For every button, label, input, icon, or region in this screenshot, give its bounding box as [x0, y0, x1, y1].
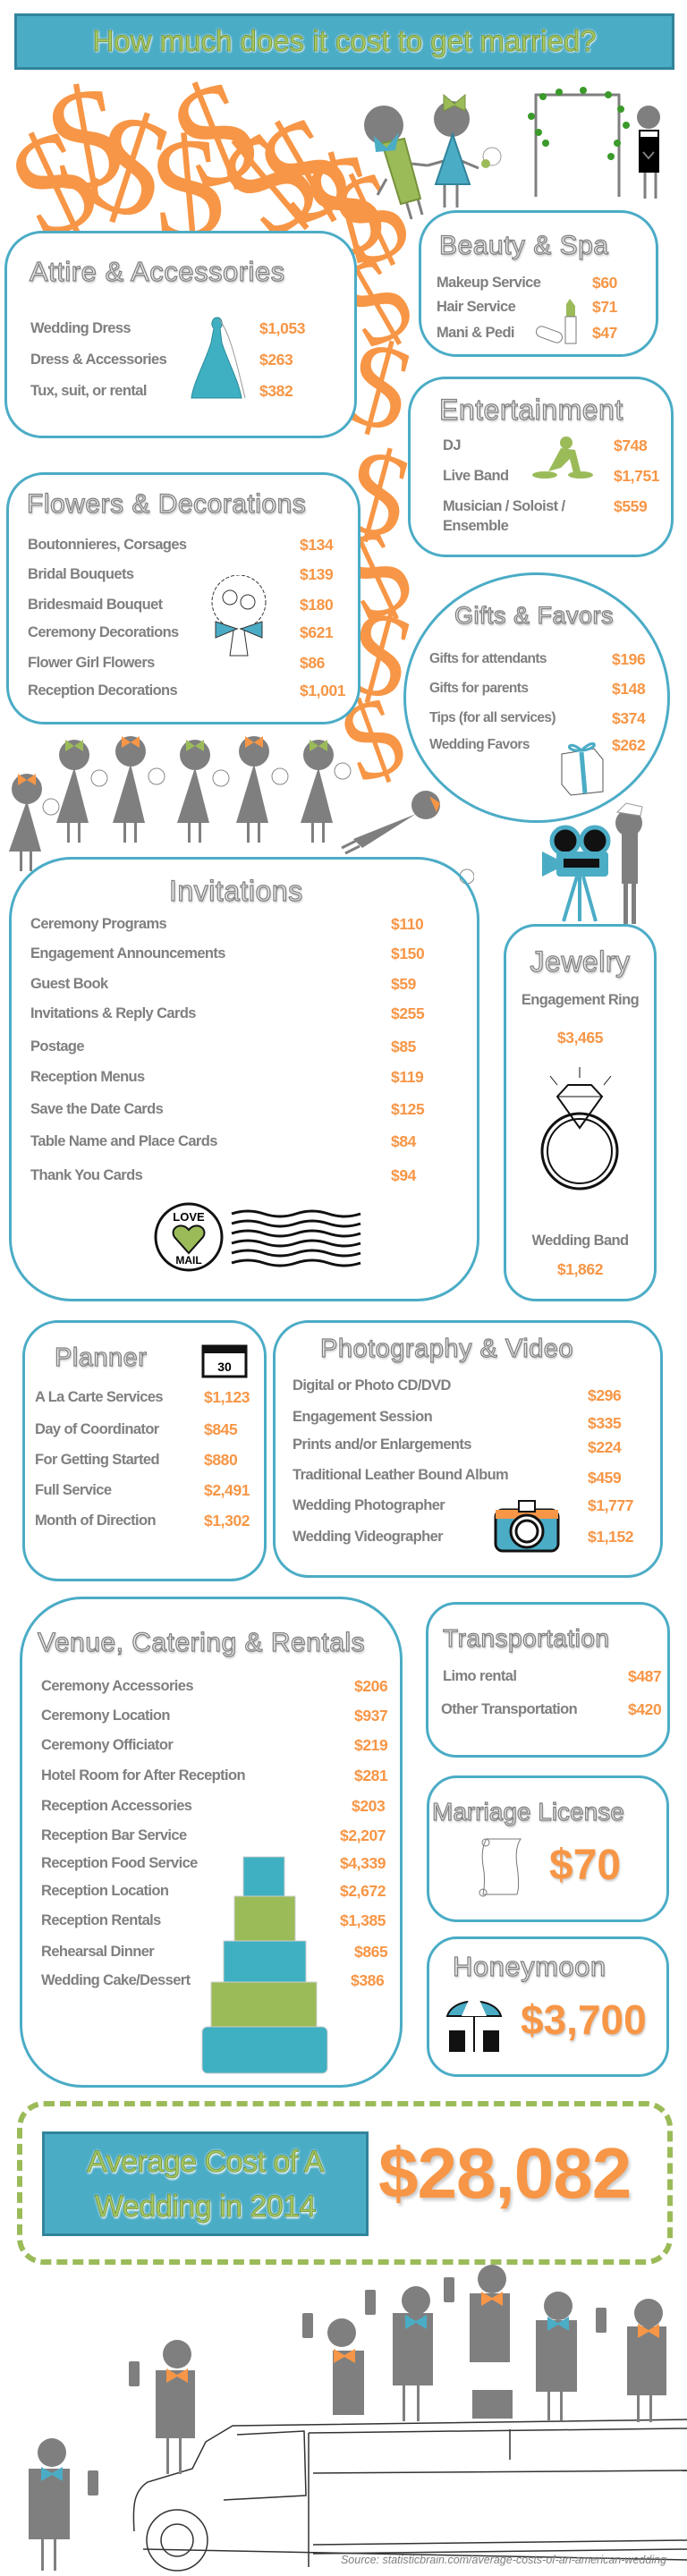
row: officiator: $219 — [354, 1736, 387, 1754]
row: other transportation — [441, 1699, 665, 1719]
row: limo: Limo rental — [443, 1668, 516, 1684]
row: full service: Full Service — [35, 1482, 111, 1498]
row: wedding band — [506, 1231, 654, 1279]
icon: scroll — [478, 1835, 528, 1900]
row: save the date: $125 — [391, 1100, 424, 1118]
row: photographer — [293, 1496, 650, 1515]
row: ceremony accessories: Ceremony Accessories — [41, 1678, 193, 1694]
decorative dollar signs: $ — [289, 120, 400, 292]
panel: marriage license — [427, 1775, 669, 1922]
row: dress & accessories — [30, 351, 293, 369]
icon: gift box — [562, 742, 603, 796]
row: reception accessories: $203 — [352, 1797, 385, 1815]
row: invitations & reply: Invitations & Reply Cards — [30, 1005, 196, 1021]
row: flower girl — [28, 654, 325, 672]
row: favors — [429, 736, 646, 754]
row: ceremony accessories — [41, 1676, 399, 1696]
row: hair — [437, 298, 617, 316]
row: bridesmaid: $180 — [300, 596, 333, 614]
row: limo: $487 — [628, 1667, 661, 1685]
row: food service: Reception Food Service — [41, 1855, 198, 1871]
row: thank you: Thank You Cards — [30, 1167, 142, 1183]
row: engagement session — [293, 1407, 650, 1427]
title banner — [14, 13, 674, 70]
row: postage: $85 — [391, 1038, 416, 1055]
row: tux: $382 — [259, 382, 293, 400]
row: musician: Musician / Soloist / — [443, 498, 565, 514]
row: reception rentals: $1,385 — [340, 1911, 386, 1929]
row: cake: Wedding Cake/Dessert — [41, 1972, 191, 1988]
row: musician — [443, 497, 648, 534]
row: digital cd — [293, 1376, 650, 1395]
row: ceremony programs: Ceremony Programs — [30, 916, 166, 932]
row: bridal bouquets — [28, 565, 333, 583]
panel: transportation — [426, 1602, 670, 1758]
panel: honeymoon — [427, 1936, 669, 2077]
decorative dollar signs: $ — [145, 106, 231, 270]
row: month of direction: $1,302 — [204, 1512, 250, 1530]
row: reception location: $2,672 — [340, 1882, 386, 1900]
row: cake — [41, 1970, 399, 1990]
row: boutonnieres: Boutonnieres, Corsages — [28, 537, 187, 553]
heading: marriage license: Marriage License — [432, 1798, 624, 1826]
row: other transportation: $420 — [628, 1700, 661, 1718]
row: reception accessories: Reception Accessories — [41, 1798, 191, 1814]
row: getting started — [35, 1450, 263, 1470]
row: album: Traditional Leather Bound Album — [293, 1467, 508, 1483]
row: ceremony decorations: Ceremony Decorations — [28, 624, 179, 640]
decorative dollar signs: $ — [333, 583, 426, 727]
row: digital cd: $296 — [588, 1386, 621, 1404]
heading: invitations: Invitations — [169, 875, 303, 907]
row: getting started: For Getting Started — [35, 1452, 159, 1468]
icon: beach umbrella and chairs — [444, 1995, 505, 2055]
row: ceremony location: $937 — [354, 1707, 387, 1724]
icon: lipstick — [536, 299, 576, 343]
icon: calendar: 30 — [217, 1360, 232, 1374]
row: tips: Tips (for all services) — [429, 710, 556, 725]
title banner: How much does it cost to get married? — [92, 24, 597, 57]
row: save the date — [30, 1100, 424, 1118]
row: album: $459 — [588, 1469, 621, 1487]
row: other transportation: Other Transportation — [441, 1701, 577, 1717]
panel: attire & accessories — [4, 231, 357, 438]
row: postage: Postage — [30, 1038, 84, 1055]
row: engagement announcements: $150 — [391, 945, 424, 962]
illustration: bridesmaids — [9, 736, 474, 884]
row: invitations & reply: $255 — [391, 1004, 424, 1022]
row: reception decorations — [28, 682, 345, 699]
row: photographer: $1,777 — [588, 1496, 633, 1514]
decorative dollar signs: $ — [315, 229, 434, 375]
row: tips: $374 — [612, 709, 645, 727]
row: rehearsal dinner: $865 — [354, 1943, 387, 1961]
decorative dollar signs: $ — [331, 422, 424, 566]
row: bridal bouquets: $139 — [300, 565, 333, 583]
row: a la carte — [35, 1387, 263, 1407]
row: hair: $71 — [592, 298, 617, 316]
row: flower girl: Flower Girl Flowers — [28, 655, 155, 671]
row: wedding dress — [30, 319, 305, 337]
row: save the date: Save the Date Cards — [30, 1101, 163, 1117]
row: mani pedi: Mani & Pedi — [437, 325, 514, 341]
row: guest book — [30, 975, 416, 993]
row: prints — [293, 1435, 650, 1454]
row: day of coordinator — [35, 1419, 263, 1439]
row: bar service: $2,207 — [340, 1826, 386, 1844]
row: guest book: $59 — [391, 975, 416, 993]
row: mani pedi — [437, 324, 617, 342]
panel: venue, catering & rentals — [20, 1597, 403, 2088]
decorative dollar signs: $ — [152, 47, 277, 222]
row: wedding band: Wedding Band — [531, 1233, 628, 1249]
row: guest book: Guest Book — [30, 976, 108, 992]
row: month of direction — [35, 1511, 263, 1530]
row: reception menus — [30, 1068, 424, 1086]
row: ceremony decorations: $621 — [300, 623, 333, 641]
row: rehearsal dinner — [41, 1942, 399, 1962]
row: mani pedi: $47 — [592, 324, 617, 342]
row: makeup: $60 — [592, 274, 617, 292]
row: videographer: $1,152 — [588, 1528, 633, 1546]
row: food service — [41, 1853, 399, 1873]
callout: average cost label: Wedding in 2014 — [95, 2190, 316, 2224]
row: engagement session: Engagement Session — [293, 1409, 432, 1425]
row: postage — [30, 1038, 416, 1055]
row: engagement announcements — [30, 945, 424, 962]
row: dress & accessories: Dress & Accessories — [30, 352, 166, 368]
heading: flowers: Flowers & Decorations — [27, 489, 306, 519]
row: bar service — [41, 1826, 399, 1845]
panel: entertainment — [408, 377, 674, 557]
value: $70: $70 — [549, 1842, 621, 1889]
panel: planner — [22, 1320, 267, 1581]
panel: invitations — [9, 857, 479, 1301]
icon: camera — [494, 1497, 560, 1553]
row: hotel room — [41, 1766, 399, 1785]
icon: love mail stamp — [154, 1202, 361, 1272]
row: thank you: $94 — [391, 1166, 416, 1184]
row: officiator: Ceremony Officiator — [41, 1737, 173, 1753]
row: makeup: Makeup Service — [437, 275, 540, 291]
row: engagement ring: Engagement Ring — [522, 992, 639, 1008]
icon: love mail stamp: LOVE — [173, 1210, 205, 1224]
row: makeup — [437, 274, 617, 292]
source note: Source: statisticbrain.com/average-costs-of-an-american-wedding — [341, 2554, 666, 2566]
row: reception rentals — [41, 1911, 399, 1930]
row: reception location: Reception Location — [41, 1883, 168, 1899]
panel: gifts & favors — [403, 572, 670, 823]
row: ceremony programs: $110 — [391, 915, 423, 933]
decorative dollar signs: $ — [36, 54, 134, 224]
panel: photography & video — [273, 1320, 663, 1578]
row: wedding dress: $1,053 — [259, 319, 305, 337]
icon: dj — [532, 436, 593, 479]
row: bridesmaid: Bridesmaid Bouquet — [28, 597, 163, 613]
row: full service: $2,491 — [204, 1481, 250, 1499]
row: table name: $84 — [391, 1132, 416, 1150]
row: wedding band: $1,862 — [557, 1260, 603, 1278]
row: invitations & reply — [30, 1004, 424, 1022]
panel: average cost total — [17, 2101, 673, 2265]
row: limo — [443, 1666, 666, 1686]
row: table name: Table Name and Place Cards — [30, 1133, 217, 1149]
row: boutonnieres — [28, 536, 334, 554]
illustration: groomsmen and limo — [0, 2263, 687, 2576]
row: parents: Gifts for parents — [429, 681, 528, 696]
heading: entertainment: Entertainment — [439, 394, 623, 426]
row: boutonnieres: $134 — [300, 536, 333, 554]
row: thank you — [30, 1166, 417, 1184]
row: dj: $748 — [614, 436, 647, 454]
panel: beauty & spa — [419, 210, 658, 357]
row: ceremony location: Ceremony Location — [41, 1707, 170, 1724]
row: engagement announcements: Engagement Announcements — [30, 945, 225, 962]
row: reception decorations: $1,001 — [300, 682, 345, 699]
decorative dollar signs: $ — [333, 315, 426, 459]
row: dj: DJ — [443, 437, 461, 453]
row: month of direction: Month of Direction — [35, 1513, 156, 1529]
row: tux — [30, 382, 293, 400]
row: dj — [443, 436, 648, 454]
row: hair: Hair Service — [437, 299, 515, 315]
row: ceremony programs — [30, 915, 423, 933]
row: live band — [443, 467, 659, 485]
row: getting started: $880 — [204, 1451, 237, 1469]
row: table name — [30, 1132, 417, 1150]
icon: wedding dress — [191, 317, 245, 399]
decorative dollar signs: $ — [71, 79, 189, 252]
row: attendants: $196 — [612, 650, 645, 668]
heading: gifts: Gifts & Favors — [454, 602, 614, 629]
icon: calendar — [199, 1341, 250, 1380]
row: reception rentals: Reception Rentals — [41, 1912, 161, 1928]
row: favors: Wedding Favors — [429, 737, 530, 752]
illustration: couple, arch and officiant — [364, 87, 660, 220]
row: food service: $4,339 — [340, 1854, 386, 1872]
row: ceremony accessories: $206 — [354, 1677, 387, 1695]
row: reception menus: Reception Menus — [30, 1069, 145, 1085]
row: digital cd: Digital or Photo CD/DVD — [293, 1377, 451, 1394]
row: favors: $262 — [612, 736, 645, 754]
heading: attire: Attire & Accessories — [30, 256, 285, 287]
row: dress & accessories: $263 — [259, 351, 293, 369]
row: hotel room: Hotel Room for After Reception — [41, 1767, 245, 1784]
heading: beauty: Beauty & Spa — [439, 231, 608, 260]
panel: flowers & decorations — [6, 472, 360, 724]
illustration: videographer with camera — [542, 803, 642, 924]
row: officiator — [41, 1735, 399, 1755]
heading: transportation: Transportation — [443, 1624, 610, 1652]
row: a la carte: $1,123 — [204, 1388, 250, 1406]
row: reception menus: $119 — [391, 1068, 423, 1086]
row: ceremony decorations — [28, 623, 333, 641]
row: live band: $1,751 — [614, 467, 659, 485]
heading: jewelry: Jewelry — [530, 945, 630, 978]
row: engagement session: $335 — [588, 1414, 621, 1432]
row: photographer: Wedding Photographer — [293, 1497, 445, 1513]
row: full service — [35, 1480, 263, 1500]
row: tips — [429, 709, 646, 727]
row: cake: $386 — [351, 1971, 384, 1989]
row: album — [293, 1465, 650, 1485]
row: day of coordinator: Day of Coordinator — [35, 1421, 159, 1437]
icon: love mail stamp: MAIL — [175, 1254, 202, 1267]
decorative dollar signs: $ — [313, 143, 428, 295]
row: prints: Prints and/or Enlargements — [293, 1436, 471, 1453]
decorative dollar signs — [0, 47, 434, 808]
row: engagement ring: $3,465 — [557, 1029, 603, 1046]
callout: average cost label — [42, 2131, 369, 2236]
row: live band: Live Band — [443, 468, 508, 484]
icon: wedding cake — [200, 1855, 329, 2077]
row: reception location — [41, 1881, 399, 1901]
decorative dollar signs: $ — [320, 502, 431, 648]
row: parents — [429, 680, 646, 698]
decorative dollar signs: $ — [326, 673, 420, 808]
row: bridal bouquets: Bridal Bouquets — [28, 566, 133, 582]
value: $28,082: $28,082 — [378, 2133, 631, 2213]
row: tux: Tux, suit, or rental — [30, 383, 147, 399]
row: day of coordinator: $845 — [204, 1420, 237, 1438]
decorative dollar signs: $ — [190, 99, 347, 267]
row: ceremony location — [41, 1706, 399, 1725]
row: prints: $224 — [588, 1438, 621, 1456]
value: $3,700: $3,700 — [521, 1996, 647, 2043]
row: bridesmaid — [28, 596, 333, 614]
row: engagement ring — [522, 992, 639, 1046]
row: a la carte: A La Carte Services — [35, 1389, 163, 1405]
row: wedding dress: Wedding Dress — [30, 320, 131, 336]
row: videographer — [293, 1527, 650, 1546]
decorative dollar signs: $ — [233, 83, 375, 257]
icon: ring — [540, 1067, 619, 1190]
row: musician: $559 — [614, 497, 647, 515]
heading: honeymoon: Honeymoon — [453, 1951, 606, 1982]
row: musician: Ensemble — [443, 518, 508, 534]
row: rehearsal dinner: Rehearsal Dinner — [41, 1944, 154, 1960]
row: reception decorations: Reception Decorations — [28, 682, 177, 699]
row: parents: $148 — [612, 680, 645, 698]
row: videographer: Wedding Videographer — [293, 1529, 443, 1545]
icon: bouquet — [211, 575, 267, 657]
panel: jewelry — [504, 924, 657, 1301]
row: hotel room: $281 — [354, 1767, 387, 1784]
row: reception accessories — [41, 1796, 399, 1816]
callout: average cost label: Average Cost of A — [87, 2145, 324, 2179]
row: flower girl: $86 — [300, 654, 325, 672]
row: bar service: Reception Bar Service — [41, 1827, 187, 1843]
heading: planner: Planner — [55, 1343, 147, 1372]
heading: venue: Venue, Catering & Rentals — [38, 1628, 365, 1657]
row: attendants — [429, 650, 646, 668]
row: attendants: Gifts for attendants — [429, 651, 547, 666]
heading: photography: Photography & Video — [320, 1335, 573, 1363]
